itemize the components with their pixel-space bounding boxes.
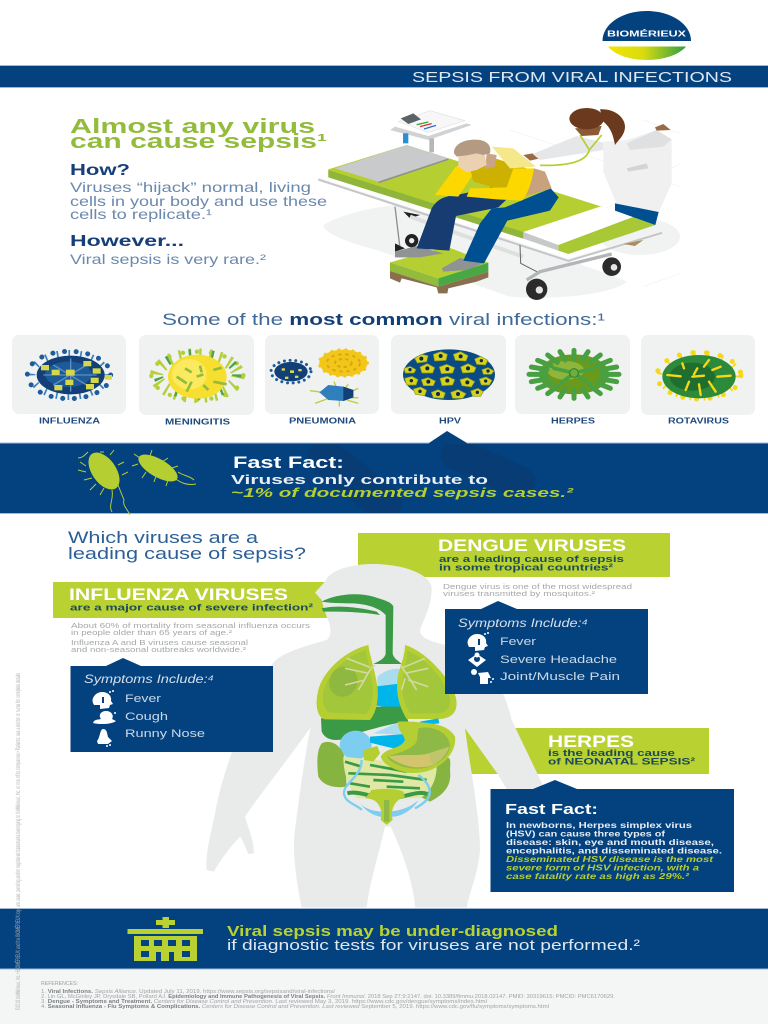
symptom list	[125, 693, 205, 740]
text: fast fact body	[231, 472, 574, 500]
text: HSV severity: Disseminated HSV disease is the most	[506, 854, 715, 864]
panel: influenza tag background	[53, 582, 328, 618]
text: under-diagnosed: if diagnostic tests for viruses are not performed.²	[227, 937, 640, 954]
symptom list: Runny Nose	[125, 728, 205, 740]
icon: joint pain	[471, 669, 494, 684]
text: fast fact body: ~1% of documented sepsis cases.²	[231, 485, 574, 500]
vertical legal text: ©2019 bioMérieux, Inc. • BIOMÉRIEUX and the BIOMÉRIEUX logo are used, pending and/or registered trademarks belonging to bioMérieux, Inc. or one of its companies • Patients: see a doctor or nurse for complete details	[15, 673, 22, 1010]
text: reference list: 4. Seasonal Influenza - Flu Symptoms & Complications. Centers for Disease Control and Prevention. Last reviewed September 5, 2019. https://www.cdc.gov/flu/symptoms/symptoms.html	[41, 1004, 549, 1010]
panel: fast fact band	[0, 431, 768, 516]
text: leading cause tropical: in some tropical countries²	[439, 562, 613, 574]
text: reference list: 3. Dengue - Symptoms and Treatment. Centers for Disease Control and Prevention. Last reviewed May 3, 2019. https://www.cdc.gov/dengue/symptoms/index.html	[41, 999, 487, 1005]
text: HSV severity: severe form of HSV infection, with a	[506, 862, 699, 872]
icon: HPV virus	[403, 349, 495, 400]
icon: influenza virus	[27, 351, 112, 399]
text: HSV description: (HSV) can cause three types of	[506, 828, 665, 838]
panel: influenza symptoms	[70, 658, 273, 752]
heading: most common viral infections: Some of the most common viral infections:¹	[162, 310, 605, 329]
text: leading cause tropical	[439, 554, 624, 574]
organ: stomach	[363, 722, 455, 773]
text: under-diagnosed	[227, 923, 640, 954]
organ: ureters	[344, 760, 430, 810]
text: reference list	[41, 989, 615, 1010]
organ: liver and kidney blue	[340, 718, 439, 759]
panel: herpes tag background	[461, 728, 709, 774]
text: influenza description: Influenza A and B viruses cause seasonal	[71, 638, 248, 647]
heading: which viruses: leading cause of sepsis?	[68, 544, 306, 563]
panel: under-diagnosed band	[0, 908, 768, 970]
icon: hospital	[128, 917, 203, 961]
text: HSV description: In newborns, Herpes simplex virus	[506, 820, 692, 830]
text: neonatal sepsis: is the leading cause	[548, 748, 675, 759]
text: HSV severity: case fatality rate as high as 29%.²	[506, 871, 691, 881]
text: leading cause tropical: are a leading cause of sepsis	[439, 554, 624, 565]
label: HPV: HPV	[439, 416, 462, 426]
organ: liver	[321, 707, 408, 740]
panel: influenza viruses	[69, 586, 313, 752]
text: influenza description: and non-seasonal outbreaks worldwide.²	[71, 645, 247, 654]
text: under-diagnosed: Viral sepsis may be under-diagnosed	[227, 923, 558, 940]
heading: dengue viruses: DENGUE VIRUSES	[438, 537, 626, 555]
icon: fever	[93, 690, 114, 709]
heading: herpes: HERPES	[548, 733, 634, 751]
icon: severe headache	[468, 652, 486, 667]
text: dengue description	[443, 582, 632, 598]
text: HSV description: encephalitis, and disseminated disease.	[506, 846, 722, 856]
text: influenza description: About 60% of mortality from seasonal influenza occurs	[71, 621, 310, 630]
text: major cause: are a major cause of severe infection²	[70, 602, 313, 614]
symptom list: Fever	[125, 693, 161, 705]
icon: fever	[468, 632, 489, 651]
text block: intro	[70, 115, 327, 267]
organ: large intestine	[317, 742, 450, 802]
icon: meningitis virus	[151, 352, 243, 400]
text: reference list: 1. Viral Infections. Sepsis Alliance. Updated July 11, 2019. https://www.sepsis.org/sepsisand/viral-infections/	[41, 989, 336, 995]
label: influenza: INFLUENZA	[39, 416, 100, 426]
heading: which viruses: Which viruses are a	[68, 528, 259, 547]
body text: how: cells to replicate.¹	[70, 206, 212, 222]
heading: almost any virus: Almost any virus	[70, 115, 315, 138]
icon: bioMérieux logo: BIOMÉRIEUX	[607, 30, 687, 38]
label: rotavirus: ROTAVIRUS	[668, 416, 730, 426]
organ: heart area	[373, 669, 405, 710]
text: reference list: 2. Lin GL, McGinley JP, Drysdale SB, Pollard AJ. Epidemiology and Immune Pathogenesis of Viral Sepsis. Front Immunol. 2018 Sep 27;9:2147. doi: 10.3389/fimmu.2018.02147. PMID: 30319615; PMCID: PMC6170629.	[41, 994, 615, 1000]
panel: meningitis	[139, 335, 254, 426]
label: pneumonia: PNEUMONIA	[289, 416, 356, 426]
heading: how: How?	[70, 162, 130, 179]
symptom list: Joint/Muscle Pain	[500, 671, 620, 683]
symptom list: Severe Headache	[500, 654, 617, 666]
icon: herpes virus	[529, 350, 619, 398]
panel: references: REFERENCES:	[41, 981, 78, 987]
heading: almost any virus	[70, 115, 327, 153]
text: neonatal sepsis: of NEONATAL SEPSIS²	[548, 756, 695, 768]
text: dengue description: viruses transmitted by mosquitos.²	[443, 589, 596, 598]
panel: herpes	[515, 335, 630, 426]
icon: bacteria	[78, 447, 196, 515]
icon: cough	[93, 711, 116, 724]
organ: small intestine	[343, 757, 437, 799]
body text: how: Viruses “hijack” normal, living	[70, 179, 311, 195]
heading: fast fact: Fast Fact:	[505, 801, 598, 818]
panel: influenza symptoms: Symptoms Include:⁴	[84, 674, 214, 686]
heading: however: However...	[70, 233, 184, 250]
heading: almost any virus: can cause sepsis¹	[70, 130, 327, 153]
illustration: human body silhouette	[206, 564, 557, 907]
label: meningitis: MENINGITIS	[165, 418, 231, 426]
panel: references	[0, 970, 768, 1024]
text: influenza description	[71, 621, 310, 654]
heading: which viruses	[68, 528, 306, 563]
panel: dengue tag background	[358, 533, 670, 577]
illustration: doctor examining patient on a bed	[318, 108, 680, 300]
body text: how	[70, 179, 327, 222]
header band: SEPSIS FROM VIRAL INFECTIONS	[412, 69, 732, 86]
organ: lungs	[317, 645, 457, 720]
header band	[0, 65, 768, 88]
text: dengue description: Dengue virus is one of the most widespread	[443, 582, 632, 591]
panel: dengue symptoms	[445, 601, 648, 694]
panel: herpes fast fact	[490, 780, 734, 892]
panel: influenza	[12, 335, 126, 426]
illustration: internal organs	[317, 594, 457, 825]
body text: how: cells in your body and use these	[70, 193, 327, 209]
panel: pneumonia	[265, 335, 379, 426]
panel: HPV	[391, 335, 506, 426]
heading: fast fact: Fast Fact:	[233, 453, 344, 472]
body text: however: Viral sepsis is very rare.²	[70, 251, 266, 267]
panel: dengue viruses	[438, 537, 648, 694]
organ: bladder and uterus	[360, 789, 418, 825]
text: influenza description: in people older than 65 years of age.²	[71, 628, 233, 637]
text: HSV description: disease: skin, eye and mouth disease,	[506, 837, 714, 847]
organ: trachea	[322, 594, 402, 664]
text: HSV severity	[506, 854, 715, 881]
symptom list	[500, 636, 620, 683]
heading: influenza viruses: INFLUENZA VIRUSES	[69, 586, 288, 604]
label: herpes: HERPES	[551, 416, 596, 426]
icon: rotavirus	[657, 352, 741, 399]
text: HSV description	[506, 820, 722, 856]
panel: dengue symptoms: Symptoms Include:⁴	[458, 618, 588, 630]
icon: bioMérieux logo	[602, 11, 691, 60]
symptom list: Fever	[500, 636, 536, 648]
icon: runny nose	[97, 729, 112, 747]
text: neonatal sepsis	[548, 748, 695, 768]
text: fast fact body: Viruses only contribute to	[231, 472, 488, 487]
panel: herpes tag	[548, 733, 695, 768]
panel: rotavirus	[641, 335, 755, 426]
icon: pneumonia viruses	[271, 350, 367, 407]
symptom list: Cough	[125, 711, 168, 723]
